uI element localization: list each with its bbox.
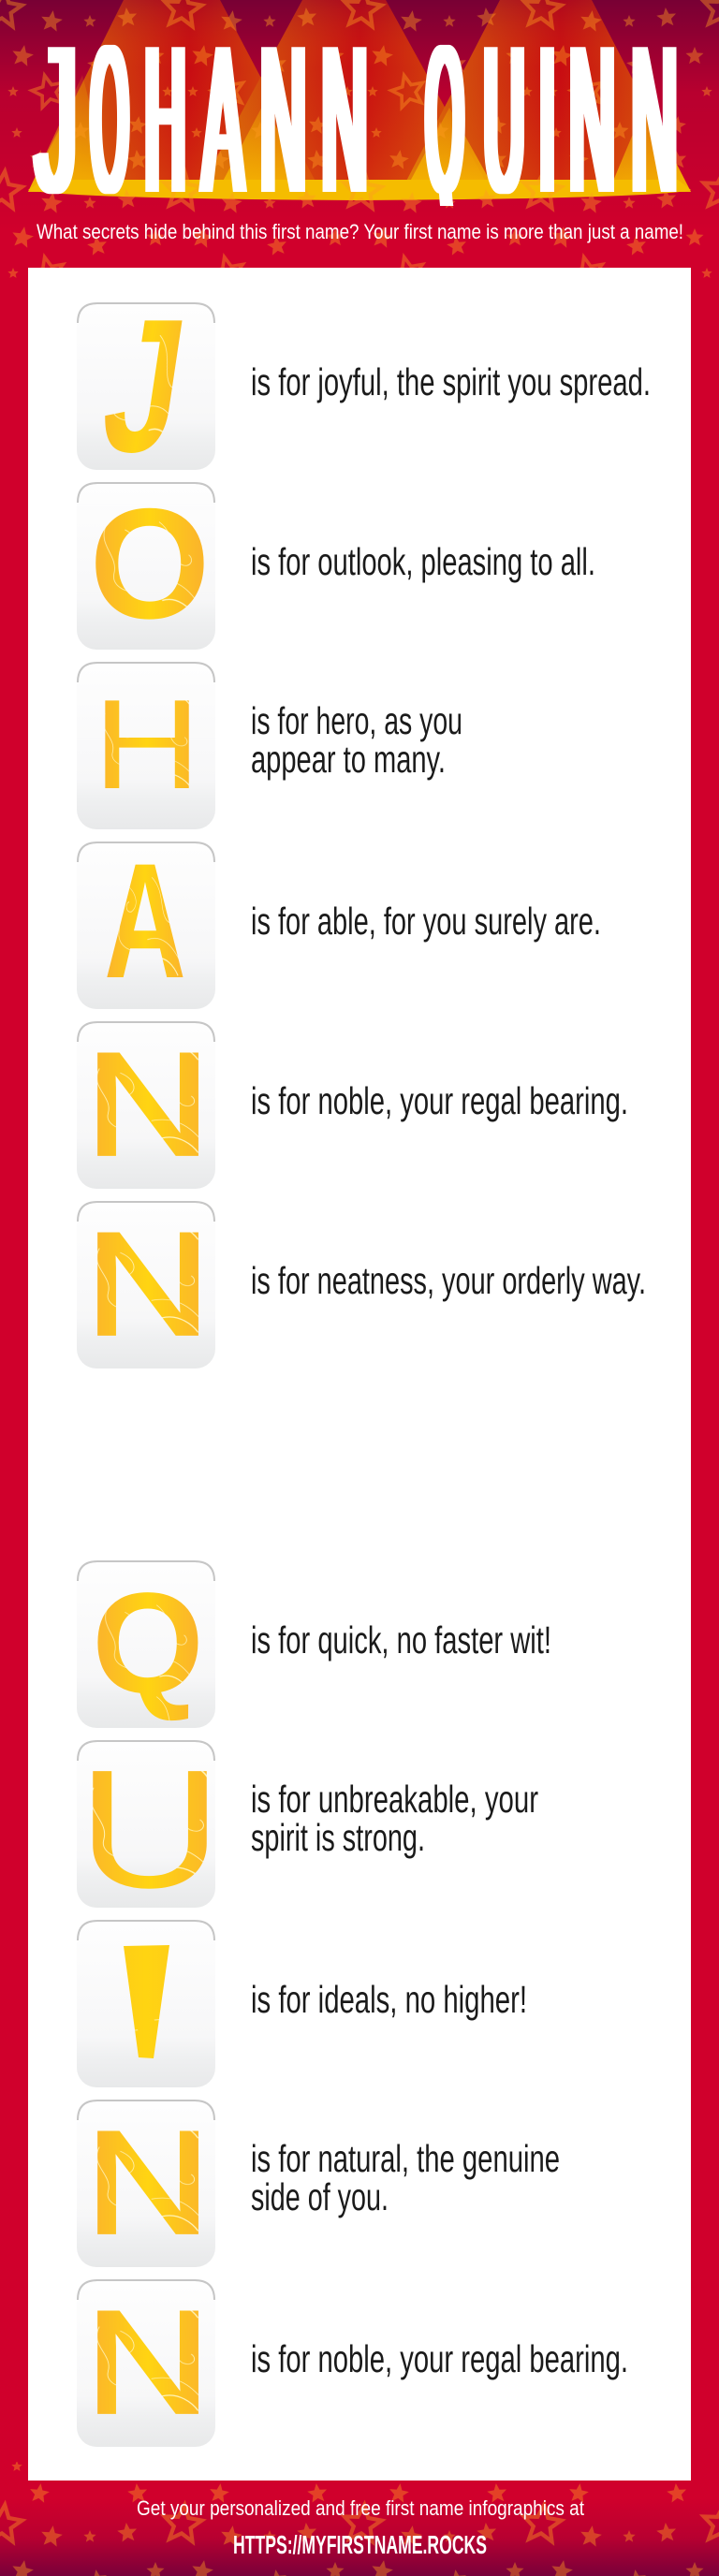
card with letter A <box>77 829 215 1012</box>
card with letter N: N <box>85 2102 211 2264</box>
title: Q <box>426 1 463 237</box>
title: N <box>631 3 678 238</box>
row: N <box>77 2279 628 2447</box>
row: N <box>77 1021 628 1189</box>
lines: side of you. <box>251 2175 389 2218</box>
card with letter N: N <box>85 1024 211 1186</box>
white panel <box>28 268 691 2481</box>
title: U <box>484 1 524 237</box>
card with letter H: H <box>93 674 201 815</box>
title: A <box>202 3 243 238</box>
lines <box>251 2137 560 2218</box>
lines: spirit is strong. <box>251 1816 425 1859</box>
title: N <box>321 3 368 238</box>
title: O <box>91 1 128 237</box>
row: I <box>77 1908 527 2094</box>
title <box>32 45 676 206</box>
card with letter N: N <box>85 1204 211 1366</box>
row: U <box>77 1734 538 1923</box>
row: N <box>77 2100 560 2267</box>
lines <box>251 1778 538 1859</box>
lines: is for unbreakable, your <box>251 1778 538 1821</box>
footer url: HTTPS://MYFIRSTNAME.ROCKS <box>233 2530 487 2559</box>
title: I <box>539 2 555 238</box>
star pattern top <box>0 0 719 281</box>
card with letter A: A <box>104 829 186 1012</box>
row: Q <box>77 1560 551 1728</box>
star pattern bottom <box>0 2462 719 2576</box>
card with letter I: I <box>89 1908 203 2094</box>
lines: appear to many. <box>251 738 446 781</box>
card with letter H <box>77 662 215 829</box>
title: N <box>569 3 615 238</box>
title: H <box>145 1 185 237</box>
card with letter N: N <box>85 2282 211 2444</box>
row: H <box>77 662 462 829</box>
line: is for ideals, no higher! <box>251 1978 527 2021</box>
spotlights <box>28 0 691 200</box>
card with letter U: U <box>78 1734 222 1923</box>
card with letter O: O <box>89 476 211 651</box>
row: A <box>77 829 601 1012</box>
lines: is for hero, as you <box>251 699 462 742</box>
row: O <box>77 476 595 651</box>
row: J <box>77 280 651 492</box>
footer text: Get your personalized and free first name infographics at <box>137 2496 584 2520</box>
lines <box>251 699 462 781</box>
lines: is for natural, the genuine <box>251 2137 560 2180</box>
line: is for quick, no faster wit! <box>251 1618 551 1661</box>
title: N <box>260 3 306 238</box>
title: J <box>36 3 77 238</box>
card with letter Q: Q <box>92 1562 204 1723</box>
row: N <box>77 1201 646 1368</box>
card with letter J: J <box>92 280 198 492</box>
